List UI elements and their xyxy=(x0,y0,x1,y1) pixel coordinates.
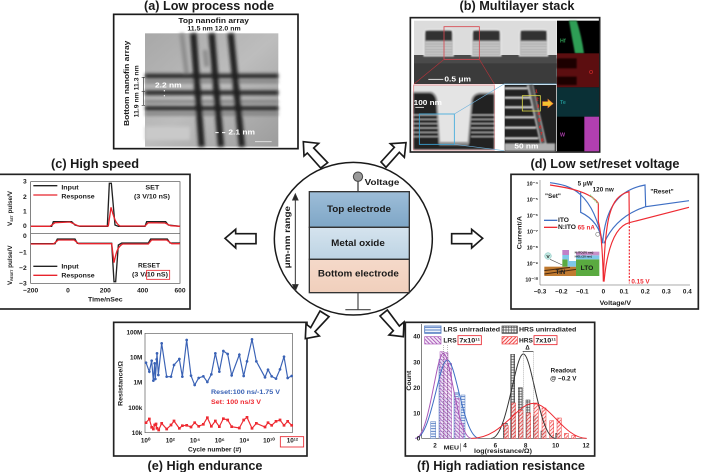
chart: I-V curves xyxy=(550,183,689,283)
axis tick labels: 1 xyxy=(23,208,27,215)
panel: (f) high radiation resistance xyxy=(405,322,595,456)
legend: LRS xyxy=(443,337,457,344)
chart: RESET pulse xyxy=(31,239,180,282)
y tick labels: 10⁻¹⁰ xyxy=(525,277,538,283)
legend xyxy=(544,217,576,231)
x tick labels: 0 xyxy=(602,289,606,296)
legend: LRS unirradiated xyxy=(443,327,500,334)
y tick labels: 10k xyxy=(132,430,143,437)
y axis titles: V xyxy=(7,222,14,226)
legend and annotations: Input xyxy=(61,263,79,270)
range arrow xyxy=(293,194,298,291)
label: bottom nanofin array: Bottom nanofin array xyxy=(122,40,131,126)
annotations: "Set" xyxy=(545,193,561,200)
x tick labels: −0.1 xyxy=(576,289,589,296)
annotation: readout: Readout xyxy=(551,367,577,374)
x tick labels: 8 xyxy=(524,442,528,449)
arrow: to panel (c) xyxy=(225,229,256,248)
axis titles: Voltage/V xyxy=(600,300,632,307)
panel: central memory cell xyxy=(225,142,483,339)
legend and annotations: Input xyxy=(61,184,79,191)
x tick labels: 10¹⁰ xyxy=(263,438,275,445)
y tick labels: 10M xyxy=(130,355,142,362)
panel: (e) high endurance xyxy=(114,322,307,456)
annotations: 65 nA xyxy=(578,225,595,232)
y tick labels: 10⁻⁵ xyxy=(527,198,538,204)
label: MEU: MEU xyxy=(444,446,459,452)
y tick labels: 10⁻⁶ xyxy=(527,214,539,220)
y tick labels: 20 xyxy=(413,385,421,392)
x tick labels: 10¹² xyxy=(287,438,298,445)
delta label: Δ xyxy=(525,345,530,351)
x tick labels: 10 xyxy=(552,442,560,449)
y tick labels: 100M xyxy=(126,330,142,337)
panel: (e) high endurance: Set: 100 ns/3 V xyxy=(211,399,262,406)
panel: (d) low set/reset voltage xyxy=(511,174,698,309)
layer numbers: 4 xyxy=(537,111,540,116)
y tick labels: 0 xyxy=(417,436,421,443)
chart: set resistance xyxy=(146,417,292,430)
panel: (c) high speed: 400 xyxy=(137,287,149,294)
legend: N:ITO xyxy=(558,224,576,231)
annotations: 120 nw xyxy=(593,186,614,193)
y tick labels xyxy=(126,330,143,437)
arrow: to panel (b) xyxy=(381,143,406,167)
x tick labels xyxy=(433,442,590,449)
x tick labels: 10⁰ xyxy=(141,438,151,445)
y tick labels: 100k xyxy=(128,405,143,412)
annotations: 0.15 V xyxy=(631,278,650,285)
y tick labels: 10 xyxy=(413,411,421,418)
label: 50 nm scale: 50 nm xyxy=(514,144,538,151)
chart: reset resistance xyxy=(146,339,292,385)
highlight box: 10 nS xyxy=(147,270,170,279)
annotations: "Reset" xyxy=(650,189,674,196)
legend and annotations xyxy=(61,184,170,280)
y tick labels: 10⁻⁷ xyxy=(527,230,538,236)
legend: 7x10¹¹ xyxy=(459,337,480,344)
panel: (c) high speed xyxy=(0,174,190,309)
legend and annotations: (3 V/10 nS) xyxy=(132,272,168,279)
device inset: V xyxy=(546,254,550,260)
x tick labels: 0.3 xyxy=(662,289,671,296)
x tick labels xyxy=(141,438,298,445)
x tick labels: 0.2 xyxy=(641,289,650,296)
voltage terminal xyxy=(353,172,400,192)
annotation: readout: @ −0.2 V xyxy=(550,376,577,383)
arrow: to panel (f) xyxy=(380,310,404,337)
legend: 7x10¹¹ xyxy=(535,337,556,344)
panel: (c) high speed: 200 xyxy=(100,287,111,294)
panel: (e) high endurance: Resistance/Ω xyxy=(117,361,124,406)
label: top nanofin array: Top nanofin array xyxy=(178,16,250,25)
x tick labels: 2 xyxy=(433,442,437,449)
layer numbers: 7 xyxy=(540,131,543,136)
axis tick labels xyxy=(19,179,27,288)
axis tick labels: 0 xyxy=(23,233,27,240)
y tick labels xyxy=(525,181,539,283)
fitted curves xyxy=(415,345,587,438)
device inset: TiN xyxy=(556,270,565,276)
x tick labels: 10⁶ xyxy=(215,438,225,445)
x tick labels: 10⁸ xyxy=(239,438,249,445)
panel: (a) low process node xyxy=(114,14,298,149)
axis tick labels: −2 xyxy=(19,265,27,272)
heading: (d) Low set/reset voltage: (d) Low set/reset voltage xyxy=(530,157,680,171)
label: 100 nm scale: 100 nm xyxy=(414,100,442,107)
y tick labels xyxy=(413,334,421,443)
layer numbers: 8 xyxy=(541,138,544,143)
EDS element maps: O xyxy=(589,70,593,76)
legend and annotations: RESET xyxy=(138,263,160,270)
arrow: to panel (e) xyxy=(305,311,329,339)
legend: ITO xyxy=(558,217,569,224)
arrow: to panel (d) xyxy=(452,229,483,248)
device inset: N:ITO(70 nm) xyxy=(575,250,593,254)
label: top fin widths: 11.5 nm 12.0 nm xyxy=(187,26,241,33)
y tick labels: 10⁻⁸ xyxy=(527,246,538,252)
layer numbers: 2 xyxy=(536,96,539,101)
y axis titles: pulse/V xyxy=(7,190,14,215)
x tick labels xyxy=(534,289,692,296)
y tick labels: 40 xyxy=(413,334,421,341)
panel: (c) high speed: V xyxy=(7,281,14,285)
axis tick labels: 2 xyxy=(23,194,27,201)
annotations xyxy=(545,181,674,285)
panel: (b) multilayer stack xyxy=(410,18,600,152)
heading: (c) High speed: (c) High speed xyxy=(51,157,139,171)
x axis title: Time/nSec xyxy=(88,296,123,303)
layer numbers: 3 xyxy=(537,104,540,109)
voltage terminal: Voltage xyxy=(365,177,400,187)
y axis titles: SET xyxy=(10,215,14,222)
legend and annotations: (3 V/10 nS) xyxy=(134,194,170,201)
y tick labels: 10⁻⁴ xyxy=(527,181,538,187)
ground symbol xyxy=(345,293,371,310)
layer: top electrode xyxy=(309,192,409,227)
axis tick labels: −1 xyxy=(19,249,27,256)
EDS element maps: W xyxy=(560,133,566,139)
annotations: 5 μW xyxy=(578,181,593,188)
layer numbers: 5 xyxy=(538,118,541,123)
x tick labels: 12 xyxy=(582,442,590,449)
layer numbers: 1 xyxy=(535,89,538,94)
lower-left TEM zoom xyxy=(414,84,557,151)
histogram bars xyxy=(431,352,576,438)
label: range: μm-nm range xyxy=(282,206,292,268)
panel: (c) high speed: −200 xyxy=(23,287,38,294)
x tick labels: 10⁴ xyxy=(190,438,200,445)
EDS element maps xyxy=(557,21,599,151)
device inset: LTO xyxy=(581,265,593,272)
x tick labels: −0.2 xyxy=(555,289,568,296)
panel: (d) low set/reset voltage: Current/A xyxy=(516,216,523,249)
layer: bottom electrode xyxy=(309,259,409,293)
x tick labels: 0.1 xyxy=(620,289,629,296)
axis tick labels: 3 xyxy=(23,179,27,186)
panel: (c) high speed: pulse/V xyxy=(7,245,14,270)
EDS element maps: Te xyxy=(560,100,566,106)
legend and annotations: SET xyxy=(145,184,159,191)
x tick labels: −0.3 xyxy=(534,289,547,296)
layer numbers: 6 xyxy=(539,125,542,130)
panel: (c) high speed: 600 xyxy=(174,287,186,294)
device inset xyxy=(544,250,599,276)
axis tick labels: 0 xyxy=(23,223,27,230)
legend: HRS xyxy=(519,337,533,344)
x tick labels: 6 xyxy=(494,442,498,449)
EDS element maps: Hf xyxy=(560,39,566,45)
layer: metal oxide xyxy=(309,227,409,259)
y tick labels: 1M xyxy=(134,380,142,387)
y tick labels: 10⁻⁹ xyxy=(527,262,538,268)
layer: metal oxide: Metal oxide xyxy=(331,238,385,248)
high-resolution layer image xyxy=(505,85,556,151)
axis tick labels: −3 xyxy=(19,281,27,288)
axis titles: Cycle number (#) xyxy=(188,447,241,454)
y tick labels: 30 xyxy=(413,359,421,366)
layer: top electrode: Top electrode xyxy=(327,204,391,214)
legend text: Reset:100 ns/-1.75 V xyxy=(211,389,281,396)
device inset: HfO₂(10 nm) xyxy=(575,254,592,258)
layer: bottom electrode: Bottom electrode xyxy=(318,269,399,279)
label: bottom fin widths: 11.9 nm 11.3 nm xyxy=(134,65,141,117)
label: 2.2 nm: 2.2 nm xyxy=(155,81,182,90)
upper TEM cross-section xyxy=(414,21,557,84)
legend: HRS unirradiated xyxy=(519,327,576,334)
panel: (c) high speed: RESET xyxy=(10,270,14,281)
TEM micrograph xyxy=(145,33,278,147)
icon: yellow arrow xyxy=(543,99,553,108)
axis titles: log(resistance/Ω) xyxy=(474,448,532,455)
legend and annotations: Response xyxy=(61,194,95,201)
annotation: readout xyxy=(550,367,577,383)
chart: SET pulse xyxy=(31,183,180,226)
x tick labels: 10² xyxy=(166,438,175,445)
legend xyxy=(425,326,576,345)
label: 2.1 nm: 2.1 nm xyxy=(228,127,256,136)
arrow: to panel (a) xyxy=(303,142,328,168)
label: 0.5 um scale: 0.5 μm xyxy=(444,77,471,84)
panel: (f) high radiation resistance: Count xyxy=(406,370,413,391)
chart frames xyxy=(31,182,180,283)
legend and annotations: Response xyxy=(61,273,95,280)
panel: (c) high speed: 0 xyxy=(66,287,70,294)
highlight box: 10^12 xyxy=(280,437,304,447)
x tick labels: 0.4 xyxy=(683,289,692,296)
x tick labels: 4 xyxy=(463,442,467,449)
